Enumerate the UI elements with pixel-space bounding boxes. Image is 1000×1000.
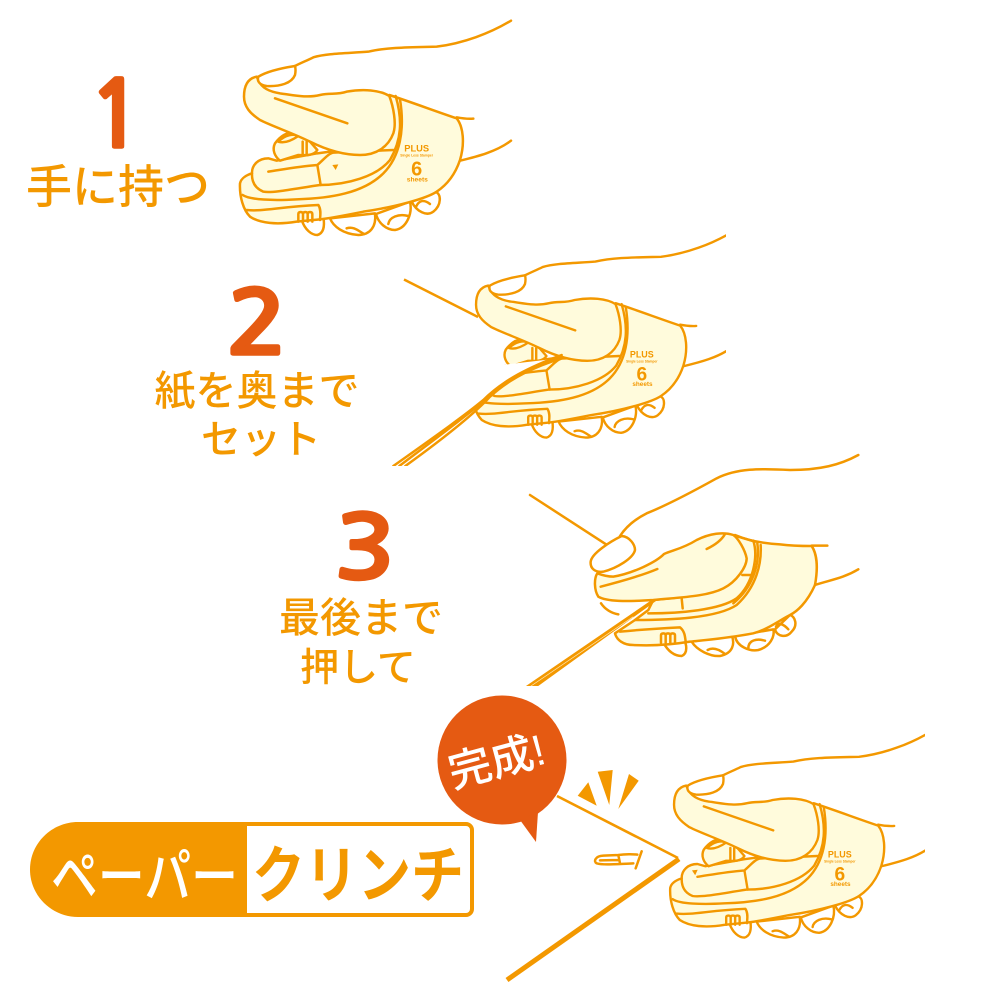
- icon: staple-free clinch: [595, 851, 642, 868]
- step 2 number: 2: [226, 281, 288, 368]
- step 2 hand with paper: sheets: [632, 381, 653, 388]
- step 2 hand with paper: [390, 232, 732, 466]
- logo: paper clinch: クリンチ: [252, 842, 464, 911]
- step 1 hand holding stapler: PLUS: [404, 143, 429, 153]
- completed speech bubble: [438, 696, 566, 842]
- step 1 number: 1: [88, 70, 144, 161]
- step 3 number: 3: [334, 506, 396, 593]
- completed speech bubble: 完成!: [443, 726, 551, 798]
- icon: burst marks: [578, 770, 639, 809]
- step 4 hand with stapler: PLUS: [828, 849, 852, 859]
- logo: paper clinch: [30, 822, 472, 917]
- step 2 hand with paper: 6: [636, 365, 647, 386]
- step 3 caption second line: 押して: [300, 647, 416, 690]
- step 2 paper top edge: [404, 280, 478, 317]
- step 2 caption second line: セット: [201, 418, 321, 462]
- step 1 hand holding stapler: 6: [411, 159, 422, 181]
- step 3 hand pressing stapler: [525, 455, 858, 687]
- step 1 hand holding stapler: sheets: [407, 176, 428, 183]
- step 4 hand with stapler: 6: [834, 865, 845, 886]
- step 4 hand with stapler: sheets: [830, 881, 851, 888]
- step 1 hand holding stapler: Single Less Stamper: [400, 154, 434, 158]
- step 2 caption: 紙を奥まで: [154, 368, 360, 414]
- step 2 hand with paper: Single Less Stamper: [626, 359, 658, 363]
- step 2 hand with paper: PLUS: [630, 349, 654, 359]
- step 4 hand with stapler: [670, 732, 930, 938]
- step 1 caption: 手に持つ: [26, 161, 210, 213]
- step 4 hand with stapler: Single Less Stamper: [824, 859, 856, 863]
- step 1 hand holding stapler: [240, 21, 511, 235]
- clinched paper corner: [507, 796, 679, 980]
- step 3 caption: 最後まで: [279, 595, 443, 641]
- logo: paper clinch: ペーパー: [51, 845, 238, 910]
